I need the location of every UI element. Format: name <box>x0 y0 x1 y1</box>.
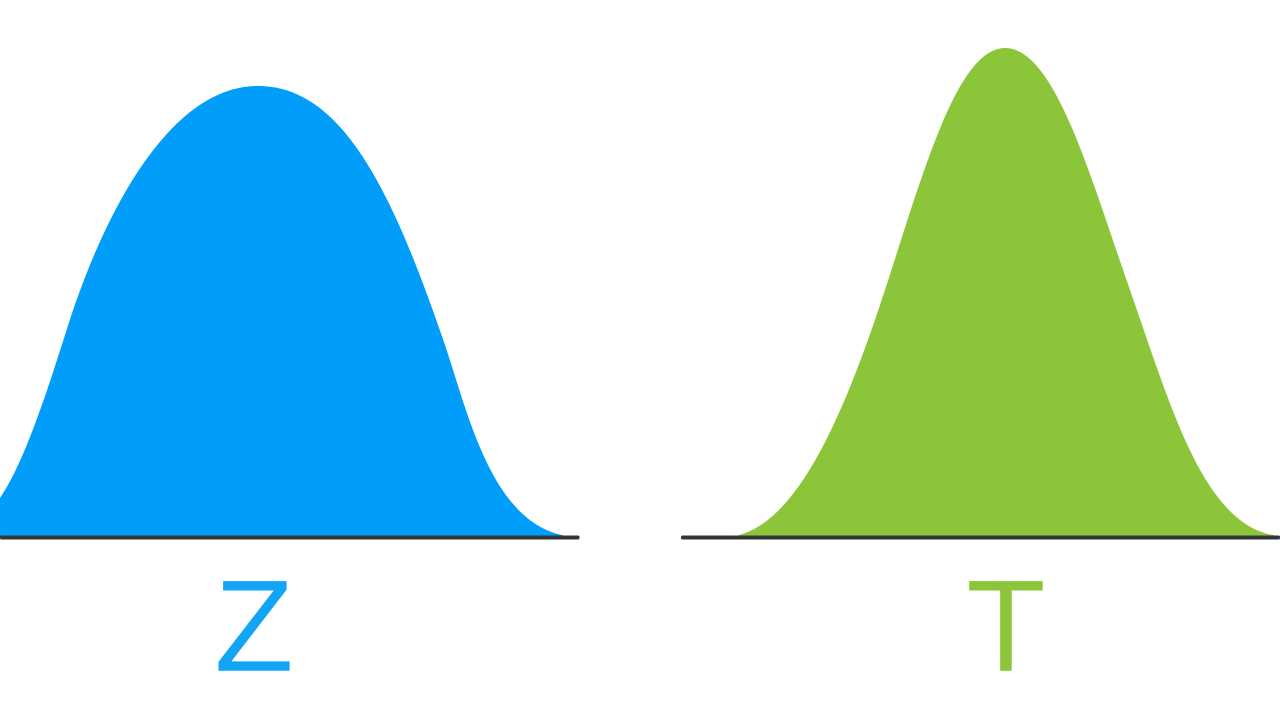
blue bell curve <box>0 86 578 537</box>
label: T: T <box>966 552 1046 699</box>
Z axis line <box>0 536 580 540</box>
T axis line <box>681 536 1280 540</box>
panel: T distribution <box>681 48 1280 699</box>
green bell curve <box>735 48 1280 537</box>
panel: Z distribution <box>0 86 580 699</box>
label: Z: Z <box>214 552 294 699</box>
